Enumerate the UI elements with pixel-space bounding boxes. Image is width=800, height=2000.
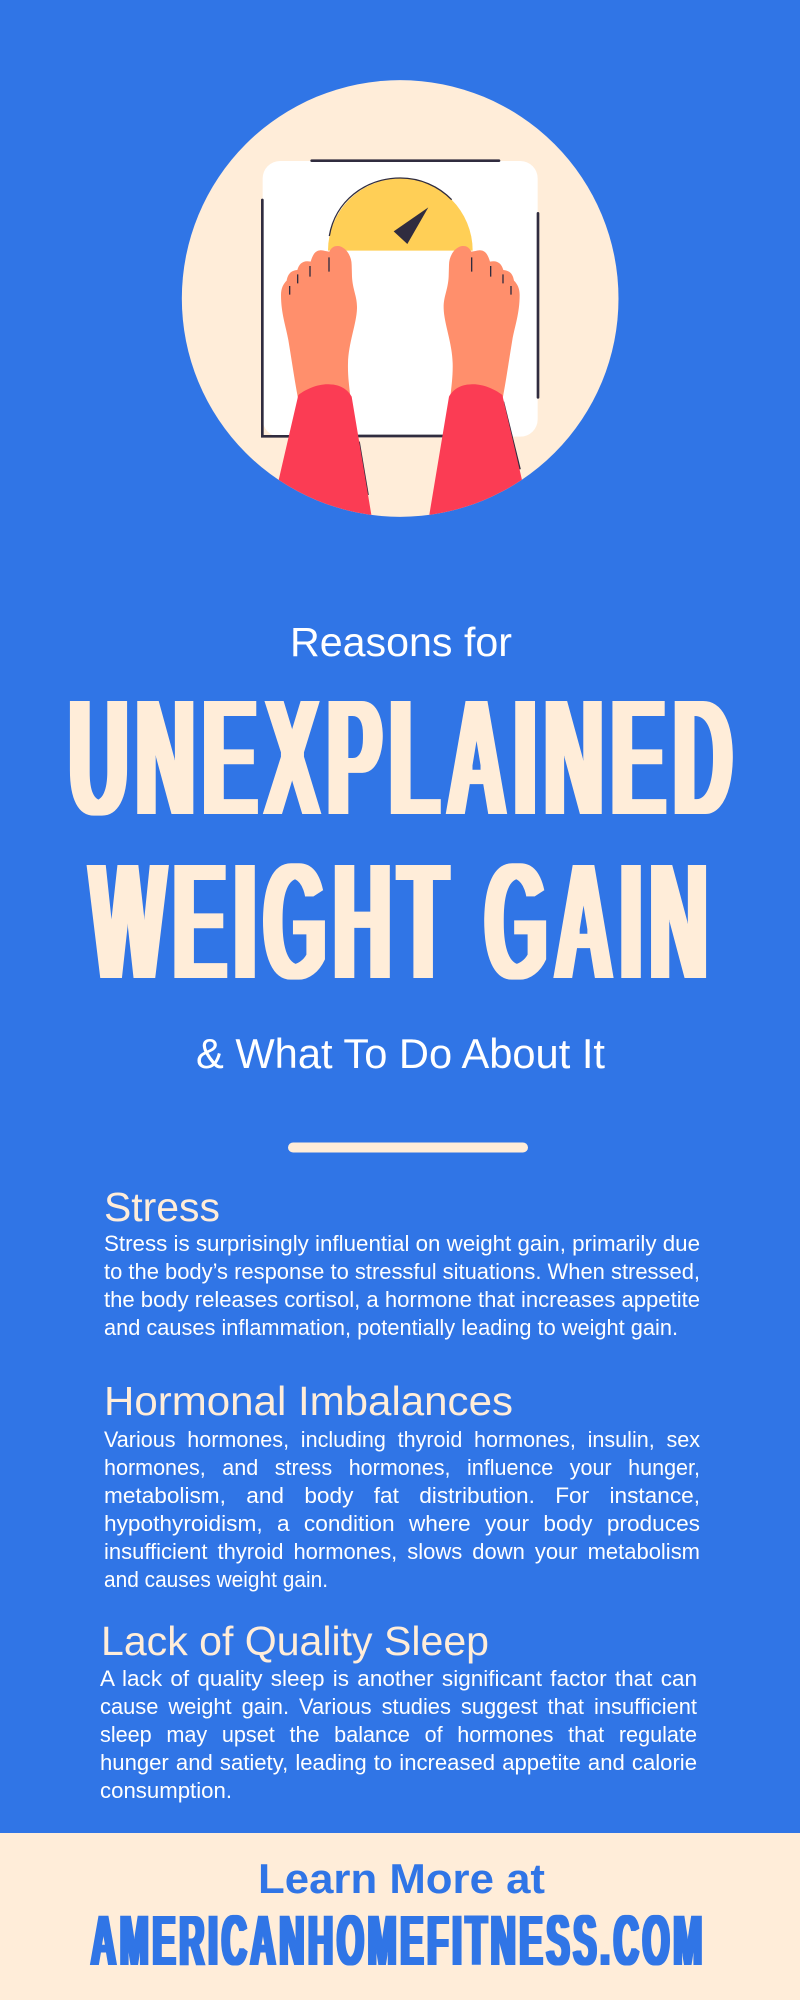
body: stress: and causes inflammation, potentially leading to weight gain. [104,1315,678,1340]
right leg [429,246,522,515]
body: hormonal imbalances: metabolism, and body fat distribution. For instance, [104,1483,700,1508]
scale dial [328,178,473,251]
body: stress: the body releases cortisol, a hormone that increases appetite [104,1287,700,1312]
body: hormonal imbalances: Various hormones, including thyroid hormones, insulin, sex [104,1427,701,1452]
body: hormonal imbalances: hormones, and stress hormones, influence your hunger, [104,1455,700,1480]
title: main heading [69,663,740,1017]
footer band [0,1833,800,2000]
heading: hormonal imbalances: Hormonal Imbalances [104,1378,513,1424]
body: stress [104,1231,700,1340]
body: stress: to the body’s response to stressful situations. When stressed, [104,1259,700,1284]
section: hormonal imbalances [104,1378,701,1592]
body: lack of quality sleep: consumption. [100,1778,232,1803]
title: intro line: Reasons for [290,619,512,665]
body: hormonal imbalances: and causes weight gain. [104,1567,328,1592]
legs and feet [278,246,522,515]
body: lack of quality sleep: sleep may upset the balance of hormones that regulate [100,1722,697,1747]
illustration: feet on a weighing scale [182,80,618,527]
body: lack of quality sleep: A lack of quality sleep is another significant factor that can [100,1666,697,1691]
title: subheading: & What To Do About It [196,1030,605,1077]
body: stress: Stress is surprisingly influential on weight gain, primarily due [104,1231,700,1256]
body: hormonal imbalances: insufficient thyroid hormones, slows down your metabolism [104,1539,700,1564]
body: lack of quality sleep: hunger and satiety, leading to increased appetite and calorie [100,1750,697,1775]
body: hormonal imbalances [104,1427,701,1592]
body: lack of quality sleep: cause weight gain. Various studies suggest that insufficient [100,1694,698,1719]
heading: stress: Stress [104,1184,220,1230]
body: hormonal imbalances: hypothyroidism, a condition where your body produces [104,1511,700,1536]
heading: lack of quality sleep: Lack of Quality Sleep [101,1618,489,1664]
scale platform [262,161,538,437]
left leg [278,246,372,515]
section: lack of quality sleep [100,1618,698,1803]
footer: learn more: Learn More at [258,1855,545,1902]
body: lack of quality sleep [100,1666,698,1803]
section: stress [104,1184,700,1340]
